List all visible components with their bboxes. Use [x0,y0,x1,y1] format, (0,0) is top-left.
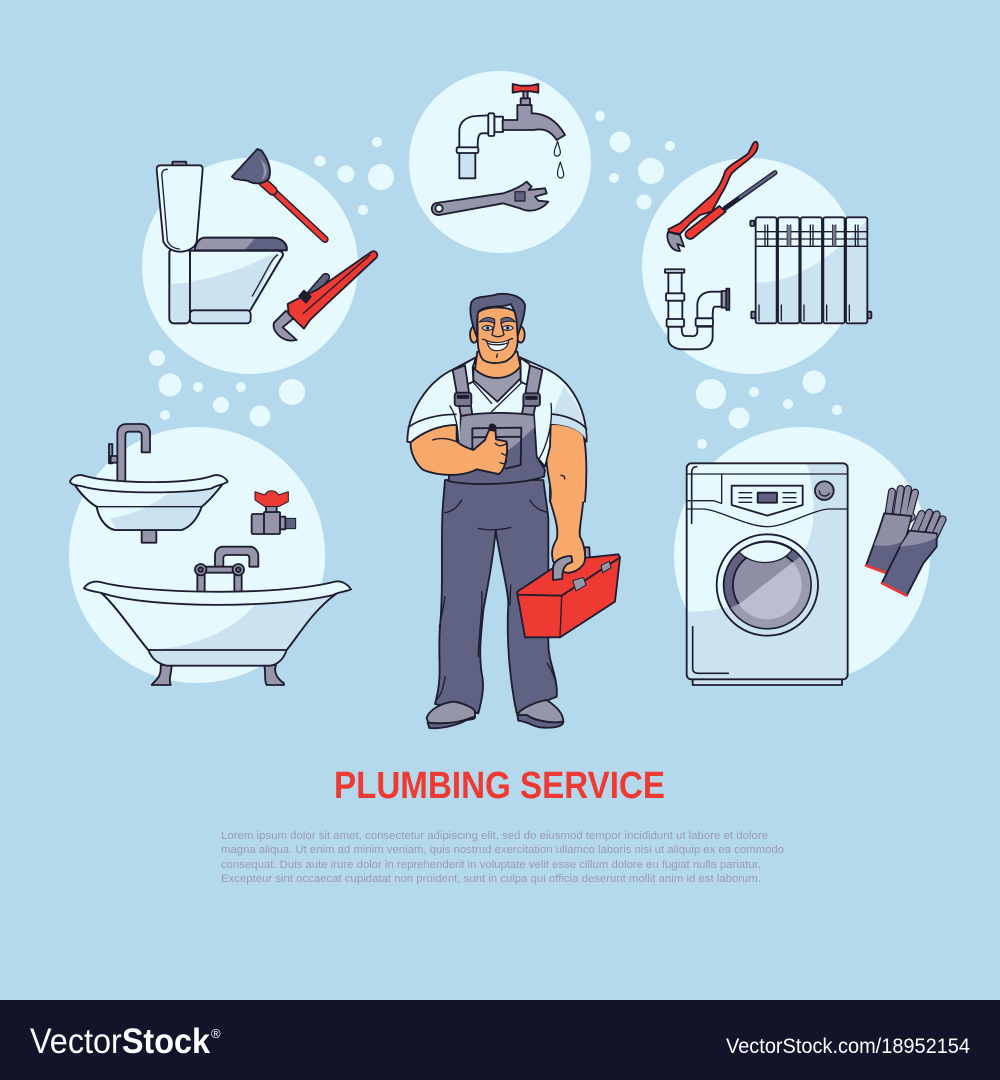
title: PLUMBING SERVICE [334,765,665,807]
overalls bib and straps [448,365,545,484]
shirt [407,357,587,467]
body text block [221,830,784,885]
neck and undershirt [461,352,534,412]
illustration: smiling plumber with toolbox [407,294,620,728]
bubble circles background [149,111,842,449]
VectorStock logo: VectorStock [30,1022,210,1061]
icon: washing machine [687,463,848,685]
right arm [546,425,586,502]
icon: pipe wrench [274,251,377,341]
icon: siphon trap [665,269,729,349]
panel: radiator, pipe wrench and siphon [642,142,871,374]
panel: toilet, plunger and pipe wrench [142,149,377,374]
panel: sink, valve and bathtub [69,424,351,685]
icon: sink with faucet [70,424,228,543]
head with hair and smile [470,294,525,363]
image id: VectorStock.com/18952154 [726,1035,970,1058]
body text block: consequat. Duis aute irure dolor in reprehenderit in voluptate velit esse cillum dolore eu fugiat nulla pariatur. [221,859,761,871]
footer bar [0,1000,1000,1080]
icon: dripping faucet [457,84,565,178]
icon: rubber gloves [866,489,943,596]
body text block: Excepteur sint occaecat cupidatat non proident, sunt in culpa qui officia deserunt mollit anim id est laborum. [221,873,761,885]
icon: adjustable wrench [432,182,548,215]
icon: toilet [157,162,287,323]
icon: ball valve [252,491,296,534]
icon: radiator [750,217,871,323]
left arm with thumbs up [411,424,507,475]
icon: gas pliers [667,142,775,251]
body text block: magna aliqua. Ut enim ad minim veniam, quis nostrud exercitation ullamco laboris nisi ut aliquip ex ea commodo [221,844,784,856]
body text block: Lorem ipsum dolor sit amet, consectetur adipiscing elit, sed do eiusmod tempor incididunt ut labore et dolore [221,830,768,842]
toolbox and gripping hand [517,480,620,637]
panel: faucet and adjustable wrench [409,71,591,253]
trousers and boots [427,480,563,728]
icon: bathtub with tap [84,547,351,685]
icon: plunger [232,149,325,239]
VectorStock logo: ® [211,1026,221,1041]
panel: washing machine and gloves [674,427,943,685]
